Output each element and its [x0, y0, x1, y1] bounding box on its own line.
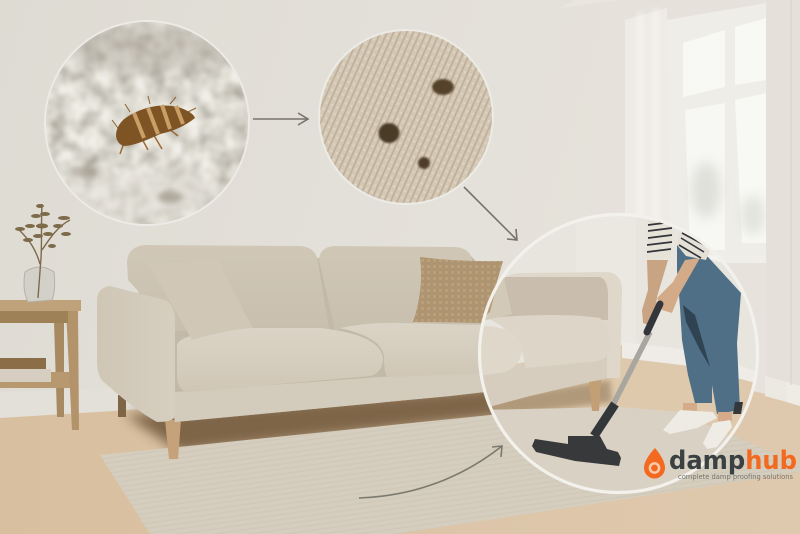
books: [0, 369, 51, 382]
circle: carpet beetle larva: [44, 20, 250, 226]
floor shadow: [492, 378, 614, 410]
logo: damphub: [644, 446, 797, 481]
sofa base: [175, 355, 607, 422]
vacuum handle: [647, 304, 660, 332]
dried plant: [15, 204, 71, 298]
circle: vacuuming: [478, 205, 770, 500]
pillow: plain: [147, 257, 253, 340]
jeans: [677, 245, 741, 414]
striped sleeve right: [677, 232, 710, 260]
side table with vase and books: [0, 204, 81, 430]
sofa: [97, 245, 622, 459]
vacuum head: [532, 436, 621, 466]
hole 1: [432, 79, 454, 95]
right arm: [657, 258, 700, 313]
seat cushions: [177, 328, 383, 392]
left arm: [97, 286, 175, 422]
shoes: [663, 410, 717, 434]
arrow: holes to vacuum: [464, 187, 517, 240]
ankles: [683, 403, 697, 411]
circle: carpet holes: [318, 29, 494, 205]
pillow: knit: [413, 257, 503, 323]
striped sleeve left: [647, 220, 673, 260]
back cushions: [127, 245, 329, 331]
window with curtain: [625, 0, 800, 406]
vacuum tube: [613, 332, 650, 405]
arrow: curved on rug: [359, 446, 502, 498]
logo wordmark: damphub: [669, 446, 797, 476]
window detail: [700, 244, 714, 256]
sofa legs: [165, 420, 181, 459]
vacuum neck: [594, 404, 615, 436]
sofa body: [130, 255, 608, 422]
sofa shadow on floor: [125, 378, 612, 452]
rug: [100, 407, 800, 534]
sofa zoom: [500, 272, 622, 378]
beetle larva: [112, 96, 196, 154]
right arm: [508, 272, 622, 378]
arrow: bug to holes: [253, 113, 308, 125]
left arm: [642, 260, 668, 327]
hole 3: [418, 157, 430, 169]
hole 2: [378, 123, 400, 143]
vase: [24, 267, 55, 302]
icon: water drop: [644, 448, 665, 479]
